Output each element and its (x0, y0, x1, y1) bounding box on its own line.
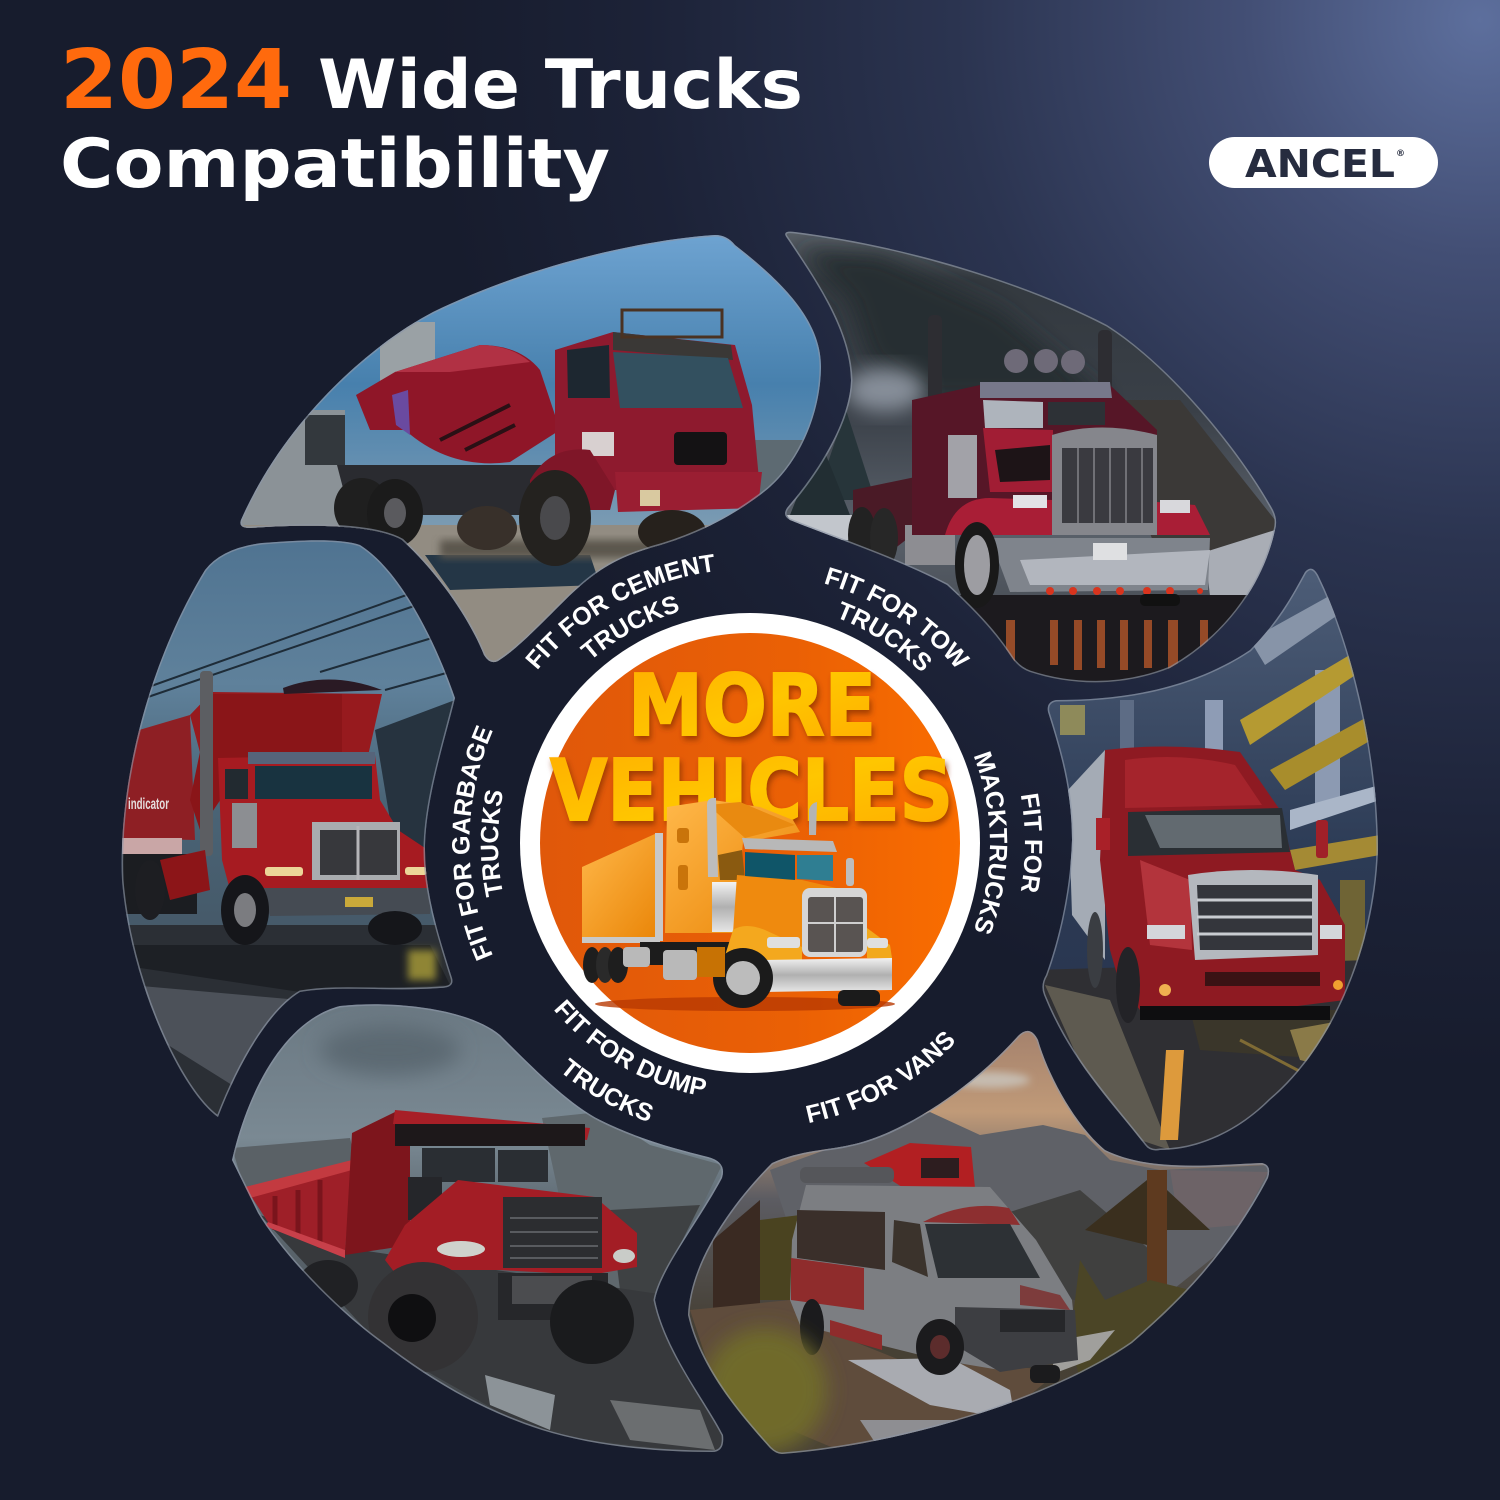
misty forest (800, 250, 1110, 400)
wet road (128, 925, 452, 1116)
label: fit for cement trucks: TRUCKS (579, 596, 678, 658)
garbage truck bumper and wheels (135, 850, 432, 945)
title: Wide Trucks (318, 46, 803, 125)
label: fit for cement trucks: FIT FOR CEMENT (525, 554, 714, 670)
label: fit for garbage trucks: FIT FOR GARBAGE (452, 725, 493, 961)
label: fit for dump trucks: FIT FOR DUMP (554, 999, 706, 1094)
mack truck cab (1096, 746, 1345, 1012)
label: fit for dump trucks: TRUCKS (564, 1058, 653, 1121)
title (60, 33, 803, 204)
label: fit for mack trucks: MACKTRUCKS (974, 751, 1008, 934)
panel: van photo (685, 1025, 1275, 1460)
panel: cement truck photo (230, 230, 830, 670)
panel: garbage truck photo (115, 535, 460, 1130)
label: fit for mack trucks: FIT FOR (1020, 794, 1042, 892)
roof tent and awning (800, 1143, 975, 1188)
floor (1042, 960, 1358, 1150)
brand logo: ANCEL: ANCEL (1245, 142, 1395, 186)
garbage truck cab (200, 671, 428, 890)
center heading: MORE VEHICLES (550, 657, 953, 841)
tow truck chrome grille (1052, 428, 1210, 535)
ground (241, 525, 711, 662)
mountains (770, 1112, 1270, 1300)
ground rocks (690, 1300, 1115, 1455)
garbage truck rear body: indicator (128, 796, 169, 813)
panel: dump truck photo (225, 1000, 730, 1460)
panel: tow truck photo (780, 225, 1290, 690)
van body (790, 1185, 1078, 1383)
mack truck wheels and lights (1087, 912, 1343, 1023)
label: fit for garbage trucks: TRUCKS (480, 790, 502, 898)
dump truck wheels (298, 1260, 634, 1372)
cement truck cab (530, 310, 762, 512)
center heading: MORE VEHICLES: MORE (628, 657, 876, 756)
label: fit for tow trucks: TRUCKS (840, 601, 931, 670)
mack truck trailer (1068, 750, 1105, 960)
tow truck cab (912, 349, 1157, 535)
brand logo: ANCEL: ® (1396, 149, 1405, 159)
title: 2024 (60, 33, 292, 128)
bare trees and buildings (375, 700, 455, 860)
mack truck chrome grille (1188, 870, 1320, 986)
label: fit for mack trucks (974, 751, 1042, 934)
title: Compatibility (60, 125, 610, 204)
garbage truck hopper (190, 679, 382, 830)
power lines (140, 592, 450, 698)
dump truck cab (385, 1148, 637, 1320)
factory columns and beams (1060, 590, 1380, 970)
wet road with reflections (958, 595, 1248, 682)
quarry rock (234, 1138, 352, 1186)
tow truck rear bed and wheels (848, 475, 955, 568)
brand logo: ANCEL (1209, 137, 1438, 188)
label: fit for vans: FIT FOR VANS (806, 1032, 954, 1123)
label: fit for tow trucks: FIT FOR TOW (824, 567, 970, 667)
orange foliage (703, 1328, 827, 1452)
center badge: white ring and orange disc (520, 613, 980, 1073)
trees (713, 1170, 1210, 1380)
center heading: MORE VEHICLES: VEHICLES (550, 742, 953, 841)
panel: mack truck photo (1035, 560, 1385, 1160)
cement truck wheels (334, 470, 706, 566)
tow truck exhaust stacks (928, 330, 1112, 396)
garbage truck rear body (122, 715, 197, 914)
cement mixer drum (337, 345, 560, 515)
tow truck bumper and wheel (955, 522, 1210, 608)
dump bed (245, 1110, 590, 1258)
center illustration: orange semi truck (582, 798, 895, 1011)
